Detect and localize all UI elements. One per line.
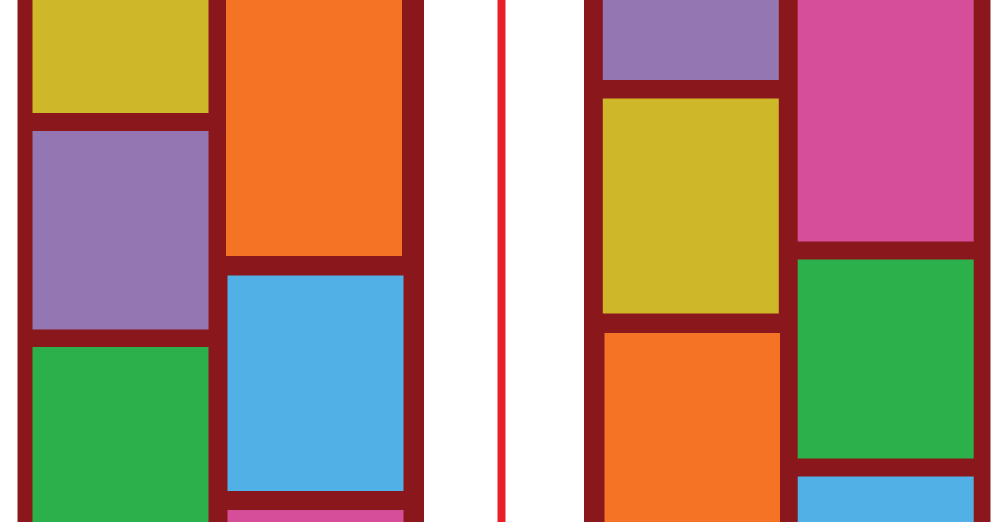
block: right blue	[798, 476, 974, 522]
panel background: right	[584, 0, 990, 522]
block: right yellow	[603, 98, 779, 314]
panel: left colour block column	[18, 0, 424, 522]
block: right pink	[798, 0, 974, 242]
panel: right colour block column	[584, 0, 990, 522]
block: left blue	[228, 276, 404, 491]
panel background: left	[18, 0, 424, 522]
block: left purple	[32, 131, 208, 330]
block: left green	[32, 347, 208, 522]
block: left orange	[226, 0, 402, 256]
block: right green	[798, 260, 974, 458]
block: left yellow	[32, 0, 208, 113]
block: right purple	[603, 0, 779, 80]
block: left pink	[228, 510, 404, 522]
block: right orange	[604, 333, 780, 522]
divider: red vertical line	[498, 0, 506, 522]
